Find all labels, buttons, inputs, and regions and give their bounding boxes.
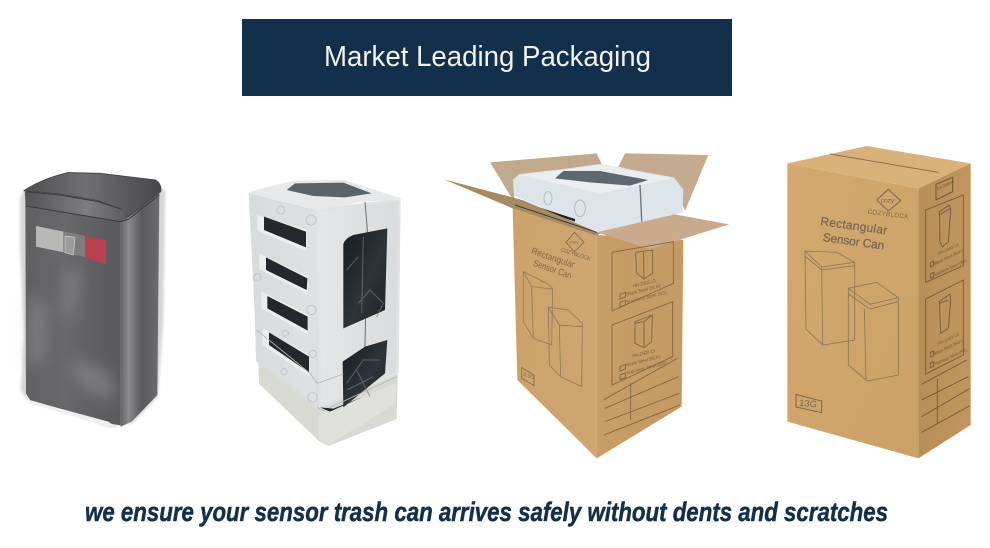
right face labels: HN-ZS02-13 <box>632 348 656 359</box>
foam top <box>250 181 399 209</box>
back right flap <box>618 153 708 211</box>
foam round pads <box>254 206 317 402</box>
right face labels: Stainless Steel (SS) <box>933 257 968 277</box>
brand name: COZYBLOCK <box>559 247 592 263</box>
foam gap <box>530 204 575 222</box>
back left flap <box>490 153 602 202</box>
right face labels: Black Steel (BLK) <box>933 338 964 356</box>
wrap base edge <box>26 395 115 427</box>
title banner <box>242 19 732 96</box>
can lid top <box>24 173 161 217</box>
foam seam <box>640 185 642 222</box>
flap fold shadow <box>515 205 597 232</box>
size badge <box>522 368 535 386</box>
brand name: COZYBLOCK <box>867 209 910 221</box>
right box face <box>597 235 683 458</box>
lid front band <box>25 191 127 221</box>
title text: Market Leading Packaging <box>324 41 651 73</box>
product: closed cardboard box <box>787 146 971 458</box>
can label window <box>65 236 75 255</box>
right face labels: Stainless Steel (SS) <box>626 290 668 305</box>
size badge: 13G <box>799 398 817 409</box>
box top <box>787 146 971 188</box>
right face print <box>603 242 680 435</box>
can label red <box>85 237 106 264</box>
plastic wrap halo <box>20 186 165 427</box>
right face labels: Black Steel (BLK) <box>626 283 661 297</box>
foam top surface <box>520 165 673 193</box>
size badge <box>796 394 822 413</box>
logo: cozy <box>881 197 895 204</box>
right face labels: HN-ZS02-13 <box>937 332 960 346</box>
front face print: Sensor Can <box>822 230 885 253</box>
left front flap <box>444 179 600 236</box>
right face labels: HN-ZS02-13 <box>632 278 657 289</box>
left face can drawings <box>523 272 582 387</box>
product name: Rectangular <box>530 246 576 270</box>
logo <box>566 232 584 252</box>
left windows <box>257 215 309 377</box>
right face print <box>922 177 970 432</box>
right face labels <box>933 179 968 367</box>
right lower window <box>343 340 387 407</box>
logo <box>877 189 901 211</box>
top window with bag <box>287 183 372 197</box>
can front face <box>25 193 121 425</box>
foam seam <box>364 202 367 383</box>
right face labels: 13 Gallon <box>936 179 955 191</box>
wrap highlights <box>28 267 113 403</box>
can label grey <box>36 226 85 257</box>
right upper window <box>343 228 387 328</box>
product name: Rectangular <box>820 214 888 237</box>
box front face <box>787 163 918 458</box>
foam left face <box>250 193 317 407</box>
foam round pads <box>544 192 585 217</box>
left face print <box>522 232 592 386</box>
lid rim line <box>26 192 159 222</box>
product: wrapped trash can <box>20 173 165 427</box>
left face print: Sensor Can <box>532 258 573 281</box>
right face labels: Black Steel (BLK) <box>626 354 661 367</box>
can right face <box>121 192 159 427</box>
right face labels: HN-ZS02-13 <box>937 242 960 256</box>
right face labels: Stainless Steel (SS) <box>626 360 668 375</box>
product: open cardboard box with foam <box>444 153 729 458</box>
foam right face <box>316 200 399 407</box>
right face labels: Stainless Steel (SS) <box>933 347 968 367</box>
foam base tray <box>259 362 397 445</box>
foam bag window <box>555 171 648 186</box>
right face labels <box>626 278 668 375</box>
front face print <box>796 189 910 413</box>
logo: cozy <box>569 240 579 245</box>
right face labels: Black Steel (BLK) <box>933 248 964 266</box>
foam block <box>514 165 682 232</box>
front can drawings <box>805 251 898 381</box>
right front flap <box>597 214 729 249</box>
left box face <box>513 208 597 458</box>
foam base right highlight <box>318 383 396 445</box>
can label middle <box>63 232 85 257</box>
product: foam packaging with bag <box>250 181 399 445</box>
bottom dark gap <box>320 397 363 412</box>
foam joint <box>257 330 397 411</box>
tape seam <box>830 154 938 172</box>
box right face <box>918 163 971 458</box>
size badge: 8.5G <box>522 372 535 381</box>
bag highlights <box>347 237 383 397</box>
